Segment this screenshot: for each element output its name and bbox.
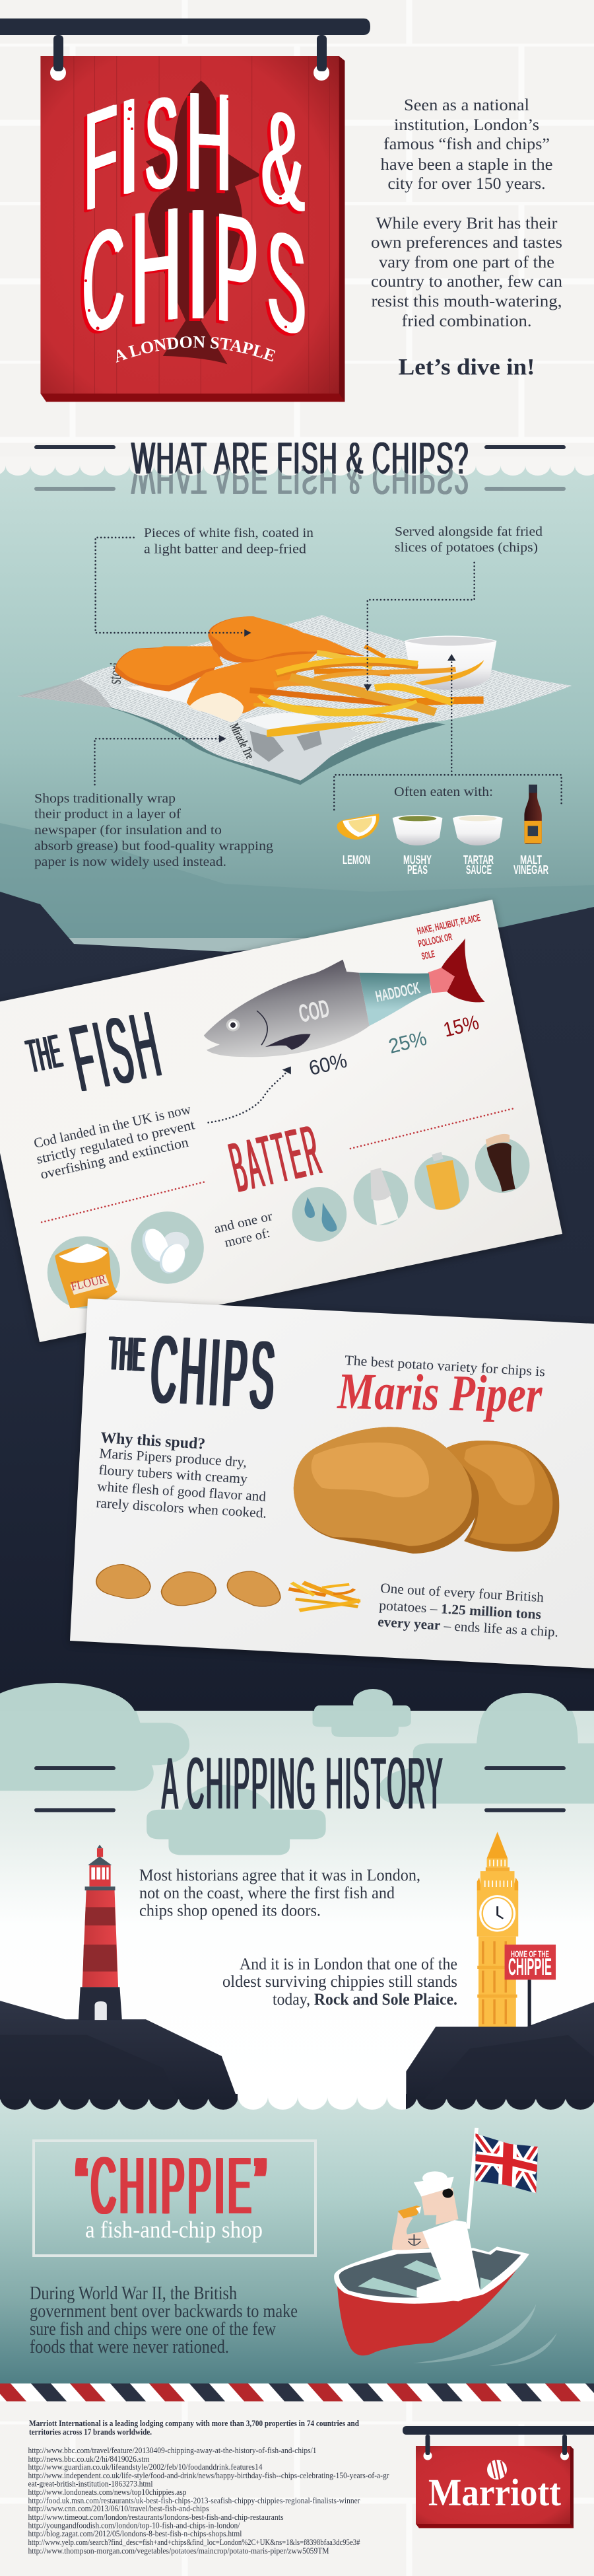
- why this spud: Why this spud?: [100, 1429, 206, 1453]
- one out of four text: every year – ends life as a chip.: [378, 1614, 559, 1640]
- wake: [413, 2304, 557, 2366]
- often eaten with labels: LEMON: [343, 853, 370, 867]
- rationing text: During World War II, the British: [30, 2283, 237, 2304]
- one out of four text: [378, 1580, 559, 1640]
- often eaten with labels: MUSHY: [403, 853, 432, 867]
- icon: oil bottle: [414, 1152, 469, 1210]
- stripe divider: [0, 2383, 594, 2402]
- rationing text: foods that were never rationed.: [30, 2336, 229, 2357]
- sailor: [392, 2171, 480, 2301]
- panel: the fish: FISH: [62, 991, 170, 1112]
- dip cup: [405, 635, 496, 690]
- newspaper: [17, 615, 572, 781]
- one out of four text: One out of every four British: [380, 1580, 544, 1605]
- history text: oldest chippie: And it is in London that one of the: [240, 1955, 457, 1974]
- callout: newspaper: their product in a layer of: [34, 807, 181, 822]
- callout: white fish: a light batter and deep-fried: [144, 542, 306, 556]
- intro text: fried combination.: [401, 312, 532, 330]
- sources list: [28, 2446, 389, 2556]
- boat rim: [334, 2246, 529, 2304]
- intro text: city for over 150 years.: [388, 175, 545, 193]
- small potato: [227, 1571, 280, 1606]
- callout: chips: Served alongside fat fried: [395, 524, 543, 539]
- often eaten with labels: MALT: [520, 853, 542, 867]
- fish percentages: 25%: [386, 1026, 429, 1058]
- batter dividers: [42, 1108, 515, 1222]
- big ben: [477, 1832, 518, 2026]
- rationing text: [30, 2283, 298, 2357]
- and one or more of: [213, 1209, 274, 1250]
- wood grain lines: [74, 56, 329, 394]
- heading: what are fish and chips: [34, 443, 566, 474]
- left cliff: [0, 2001, 238, 2099]
- background: sky clouds: [0, 1711, 594, 1855]
- fish labels: POLLOCK OR: [417, 931, 453, 950]
- sources list: http://www.londoneats.com/news/top10chippies.asp: [28, 2487, 186, 2497]
- fish percentages: 15%: [441, 1011, 481, 1042]
- sources list: eat-great-british-institution-1863273.html: [28, 2480, 153, 2489]
- newspaper left image: [17, 679, 112, 708]
- sign title: fish and chips: C: [81, 193, 123, 369]
- why this spud: rarely discolors when cooked.: [96, 1495, 267, 1521]
- big potatoes: [294, 1427, 559, 1554]
- background: sky: [0, 1711, 594, 2100]
- panel: the chips: CHIPS: [147, 1315, 279, 1429]
- fish silhouette: [146, 81, 261, 364]
- icon: flour: [48, 1236, 120, 1308]
- callout: newspaper: newspaper (for insulation and to: [34, 823, 222, 838]
- history text: oldest chippie: today, Rock and Sole Plaice.: [273, 1991, 457, 2009]
- sources list: http://news.bbc.co.uk/2/hi/8419026.stm: [28, 2454, 150, 2464]
- fish illustration: [204, 938, 485, 1057]
- why this spud: white flesh of good flavor and: [97, 1478, 267, 1505]
- newspaper shadow: [97, 694, 446, 785]
- intro text: While every Brit has their: [376, 215, 558, 233]
- intro text: Seen as a national: [404, 96, 529, 114]
- heading: the fish: THE: [22, 1025, 65, 1083]
- background: teal sea: [0, 462, 594, 938]
- chippie sign text: HOME OF THE: [511, 1949, 549, 1959]
- panel: the fish: BATTER: [222, 1110, 329, 1207]
- flour label: FLOUR: [69, 1272, 108, 1294]
- cod text: overfishing and extinction: [39, 1134, 190, 1182]
- background: scalloped edge: [0, 456, 594, 476]
- about marriott text: [29, 2418, 360, 2437]
- background: brick wall footer: [0, 2402, 594, 2576]
- sign title distress marks: [84, 98, 292, 330]
- wave scallops white: [0, 2094, 594, 2110]
- fish labels: COD: [296, 995, 332, 1028]
- callout: white fish: [144, 526, 314, 556]
- cod text: strictly regulated to prevent: [35, 1116, 196, 1167]
- callout arrows: [219, 629, 456, 742]
- history text: first shop: Most historians agree that it was in London,: [139, 1867, 420, 1884]
- flag pole: [468, 2128, 477, 2229]
- dotted callout lines: [95, 538, 562, 810]
- and one or more of: more of:: [223, 1226, 271, 1250]
- sources list: http://www.thompson-morgan.com/vegetables/potatoes/maincrop/potato-maris-piper/zww5059TM: [28, 2546, 329, 2556]
- panel: the chips: [70, 1299, 594, 1670]
- sign title: fish and chips: H: [129, 172, 181, 359]
- teal lower section: [0, 2095, 594, 2384]
- sign title: fish and chips: [81, 63, 305, 369]
- cod text: [32, 1101, 196, 1182]
- lighthouse: [79, 1845, 122, 2020]
- callout: newspaper: Shops traditionally wrap: [34, 791, 176, 806]
- small chips: [288, 1583, 360, 1610]
- sign title: fish and chips: H: [185, 63, 231, 221]
- sources list: http://www.guardian.co.uk/lifeandstyle/2002/feb/10/foodanddrink.features14: [28, 2462, 263, 2472]
- hanging sign: [0, 18, 370, 402]
- one out of four text: potatoes – 1.25 million tons: [379, 1597, 542, 1622]
- sources list: http://www.yelp.com/search?find_desc=fish+and+chips&find_loc=London%2C+UK&ns=1&ls=f8398bfaa3dc95e3#: [28, 2538, 360, 2547]
- why this spud: floury tubers with creamy: [98, 1462, 248, 1487]
- history text: first shop: [139, 1867, 420, 1919]
- callouts and accompaniments: [95, 538, 562, 845]
- boat seats: [358, 2260, 492, 2297]
- often eaten with labels: Often eaten with:: [394, 785, 493, 799]
- chippie sign: [505, 1945, 556, 2026]
- icon: water: [292, 1187, 346, 1242]
- panel: the fish: [0, 900, 562, 1342]
- background: dark navy band: [0, 892, 594, 1717]
- intro text: country to another, few can: [371, 273, 563, 291]
- intro text: famous “fish and chips”: [383, 135, 550, 153]
- chips: [250, 646, 484, 737]
- union jack: [475, 2133, 538, 2193]
- background: lower teal hills: [0, 823, 594, 964]
- fish and chips on newspaper: [17, 615, 572, 785]
- icon: mushy peas: [393, 815, 442, 845]
- sources list: http://www.cnn.com/2013/06/10/travel/best-fish-and-chips: [28, 2504, 209, 2513]
- boat with sailor: [334, 2128, 557, 2366]
- about marriott text: territories across 17 brands worldwide.: [29, 2427, 152, 2437]
- fish labels: HAKE, HALIBUT, PLAICE: [416, 912, 482, 937]
- heading: the fish: [22, 991, 170, 1112]
- sign title: fish and chips: S: [266, 197, 305, 369]
- sign hangers: [424, 2435, 569, 2460]
- small potato: [96, 1565, 150, 1598]
- history text: oldest chippie: [222, 1955, 457, 2009]
- why this spud: [96, 1429, 267, 1521]
- maris piper: Maris Piper: [336, 1362, 543, 1423]
- intro text: resist this mouth-watering,: [371, 293, 562, 310]
- callout: white fish: Pieces of white fish, coated in: [144, 526, 314, 540]
- sources list: http://blog.zagat.com/2012/05/londons-8-best-fish-n-chips-shops.html: [28, 2529, 242, 2538]
- intro text: Let’s dive in!: [399, 354, 535, 380]
- sign title: fish and chips: F: [82, 75, 116, 242]
- heading: the chips: THE: [106, 1327, 145, 1382]
- cod text: Cod landed in the UK is now: [32, 1101, 193, 1151]
- fish labels: HADDOCK: [374, 979, 422, 1006]
- chippie definition box: “CHIPPIE”: [74, 2141, 268, 2231]
- sign hangers: [50, 35, 329, 81]
- sources list: http://www.bbc.com/travel/feature/20130409-chipping-away-at-the-history-of-fish-and-chips/1: [28, 2446, 317, 2455]
- sources list: http://youngandfoodish.com/london/top-10-fish-and-chips-in-london/: [28, 2521, 240, 2530]
- newspaper word stories: stori: [104, 662, 127, 685]
- fried fish pieces: [115, 616, 365, 722]
- sources list: http://www.independent.co.uk/life-style/food-and-drink/news/happy-birthday-fish--chips-celebrating-150-years-of-a-gr: [28, 2471, 389, 2480]
- sign rod: [403, 2426, 594, 2435]
- boat hull: [337, 2255, 527, 2355]
- marriott wordmark: Marriott: [428, 2471, 562, 2514]
- callout: newspaper: [34, 791, 273, 869]
- marriott logo mark: [487, 2460, 507, 2480]
- often eaten with labels: PEAS: [407, 863, 428, 877]
- fish labels: [296, 912, 482, 1028]
- chippie definition box: [34, 2141, 315, 2256]
- white inner wrap: [125, 682, 322, 731]
- intro text: have been a staple in the: [380, 156, 553, 174]
- often eaten with labels: TARTAR: [463, 853, 494, 867]
- paper sheet: [0, 900, 562, 1342]
- background: clouds above sky: [0, 1683, 569, 1752]
- chippie sign text: [508, 1949, 552, 1980]
- icon: lemon: [337, 814, 379, 840]
- often eaten with labels: SAUCE: [466, 863, 492, 877]
- dotted arrow to 60 percent: [209, 1067, 291, 1123]
- fish percentages: [307, 1011, 481, 1080]
- rationing text: government bent over backwards to make: [30, 2301, 298, 2322]
- sign title: fish and chips: &: [260, 77, 303, 240]
- intro text: [371, 96, 563, 380]
- often eaten with labels: [343, 785, 548, 877]
- fish labels: SOLE: [420, 948, 436, 962]
- wave scallops dark: [0, 2094, 594, 2110]
- callout: chips: slices of potatoes (chips): [395, 540, 538, 555]
- sign title: fish and chips: S: [144, 69, 177, 219]
- sign title: fish and chips: P: [214, 180, 257, 361]
- small potato: [162, 1572, 216, 1606]
- sign title: fish and chips: I: [116, 67, 139, 226]
- background: brick wall header: [0, 0, 594, 464]
- sign subtitle: A LONDON STAPLE: [116, 336, 276, 363]
- rationing text: sure fish and chips were one of the few: [30, 2318, 276, 2340]
- intro text: own preferences and tastes: [371, 234, 562, 252]
- chippie definition: a fish-and-chip shop: [85, 2217, 263, 2243]
- sign board: [40, 56, 345, 402]
- why this spud: Maris Pipers produce dry,: [99, 1445, 248, 1470]
- sources list: http://www.timeout.com/london/restaurants/londons-best-fish-and-chip-restaurants: [28, 2513, 284, 2522]
- right cliff: [406, 2002, 594, 2099]
- history text: oldest chippie: oldest surviving chippies still stands: [222, 1973, 457, 1991]
- newspaper word miracle: Miracle Tre: [226, 721, 257, 761]
- often eaten with labels: VINEGAR: [513, 863, 548, 877]
- fish percentages: 60%: [307, 1049, 349, 1080]
- icon: malt vinegar: [524, 785, 542, 844]
- boat interior: [339, 2250, 521, 2298]
- callout: newspaper: absorb grease) but food-quality wrapping: [34, 839, 273, 853]
- intro text: vary from one part of the: [379, 254, 554, 271]
- history text: first shop: not on the coast, where the first fish and: [139, 1884, 395, 1902]
- icon: beer: [475, 1134, 529, 1193]
- icon: tartar sauce: [453, 815, 503, 845]
- callout: newspaper: paper is now widely used instead.: [34, 855, 226, 869]
- sources list: http://food.uk.msn.com/restaurants/uk-best-fish-chips-2013-seafish-chippy-chippies-regional-finalists-winner: [28, 2496, 360, 2505]
- paper sheet: [70, 1299, 594, 1670]
- history text: first shop: chips shop opened its doors.: [139, 1902, 321, 1919]
- about marriott text: Marriott International is a leading lodging company with more than 3,700 properties in 74 countries and: [29, 2418, 360, 2428]
- and one or more of: and one or: [213, 1209, 274, 1236]
- intro text: institution, London’s: [394, 116, 539, 134]
- best potato text: The best potato variety for chips is: [345, 1352, 546, 1379]
- icon: soda water: [354, 1168, 408, 1226]
- callout: chips: [395, 524, 543, 555]
- marriott hanging sign: [403, 2426, 594, 2528]
- newspaper photo collage: [244, 720, 360, 781]
- sign title: fish and chips: I: [184, 177, 209, 352]
- heading: the chips: [106, 1315, 279, 1429]
- icon: eggs: [131, 1211, 204, 1284]
- sign board: [416, 2446, 574, 2528]
- sign rod: [0, 18, 370, 35]
